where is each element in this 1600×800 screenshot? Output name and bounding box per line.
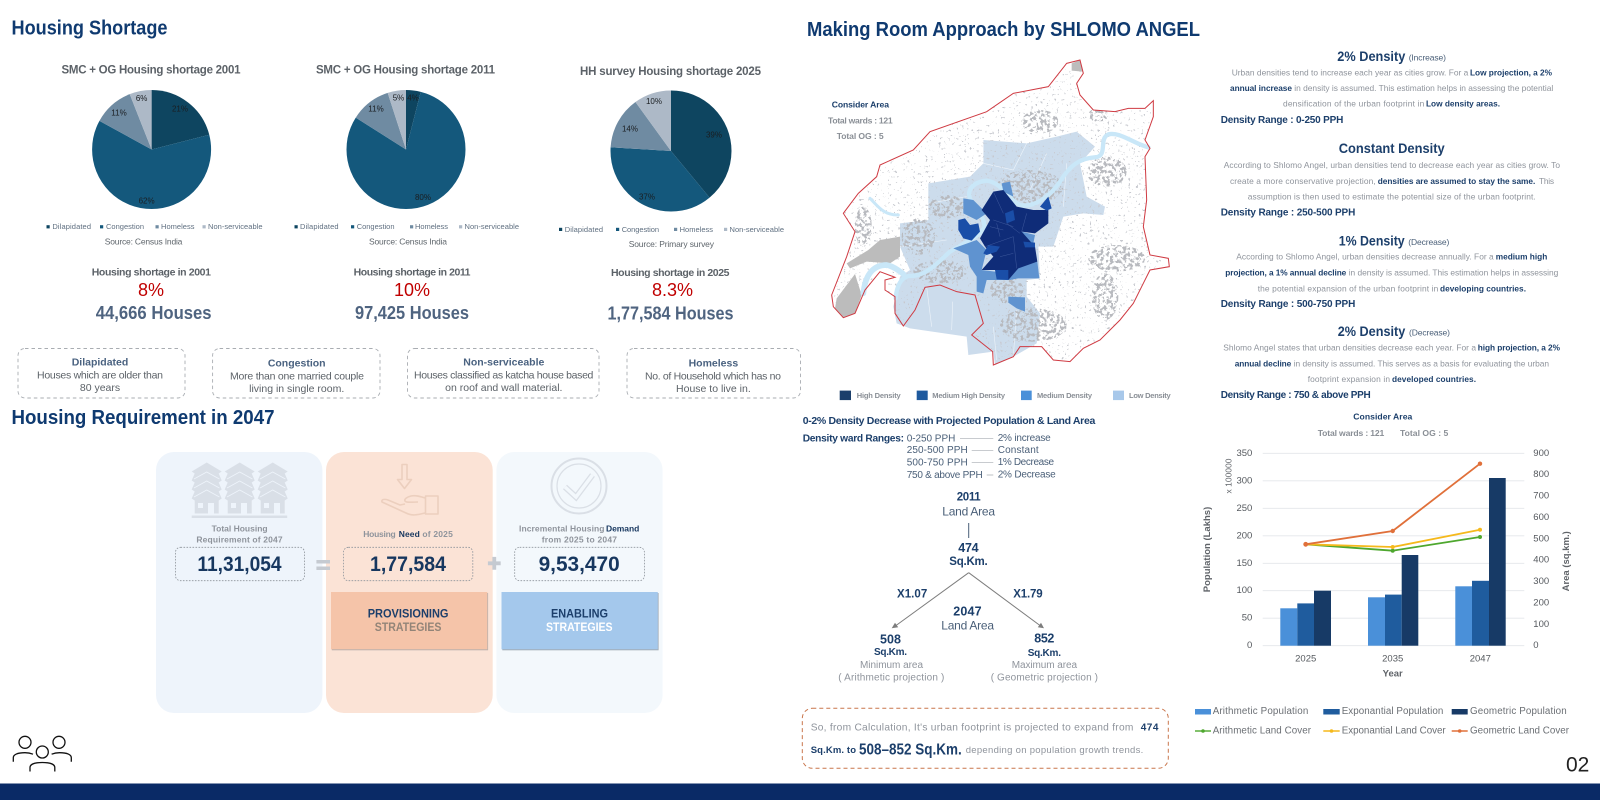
text block: constant density: create a more conservative projection, bbox=[1230, 176, 1376, 186]
note: consider area: Total wards : 121 bbox=[1318, 428, 1385, 438]
map legend: Medium High Density bbox=[932, 391, 1006, 400]
text block: 2% density increase: Urban densities tend to increase each year as cities grow. For a bbox=[1232, 67, 1469, 77]
value: 1,77,584: 1,77,584 bbox=[370, 553, 446, 576]
panel: incremental demand bbox=[496, 452, 663, 713]
legend 2011: Dilapidated bbox=[300, 222, 338, 231]
callout: urban footprint: 474 bbox=[1141, 722, 1159, 734]
axis titles: Area (sq.km.) bbox=[1561, 531, 1572, 591]
legend 2025 bbox=[559, 225, 784, 234]
callout: urban footprint: depending on population growth trends. bbox=[966, 745, 1143, 756]
density ward ranges table: 250-500 PPH bbox=[907, 445, 968, 456]
medium high wards bbox=[958, 197, 1052, 280]
text block: 2% density decrease: footprint expansion in bbox=[1308, 374, 1390, 384]
legend 2025: Dilapidated bbox=[565, 225, 603, 234]
label: incremental demand: Incremental Housing bbox=[519, 524, 604, 534]
note: consider area: Consider Area bbox=[1353, 412, 1413, 422]
combo chart: population and land area bbox=[1195, 448, 1572, 736]
label: total requirement: Total Housing bbox=[212, 524, 268, 534]
gridlines bbox=[1263, 453, 1524, 646]
pie labels 2011: 80% bbox=[415, 193, 431, 202]
note: consider area: Total OG : 5 bbox=[1400, 428, 1449, 438]
chart legend: Arithmetic Population bbox=[1213, 706, 1308, 717]
definition: Homeless bbox=[627, 348, 800, 398]
text block: 1% density decrease: (Decrease) bbox=[1408, 237, 1449, 247]
multiplier labels: X1.07 bbox=[897, 588, 927, 600]
box: provisioning strategies: STRATEGIES bbox=[375, 620, 441, 634]
map note: consider area: Consider Area bbox=[832, 100, 889, 110]
heading: Making Room Approach: Making Room Approach by SHLOMO ANGEL bbox=[807, 19, 1200, 41]
definition: Dilapidated: 80 years bbox=[80, 382, 120, 394]
legend 2025: Non-serviceable bbox=[730, 225, 784, 234]
text block: 2% density increase: densification of the urban footprint in bbox=[1283, 98, 1425, 108]
legend 2001 bbox=[46, 222, 262, 231]
line: arithmetic land cover bbox=[1306, 535, 1482, 553]
text block: 2% density increase: Low projection, a 2% bbox=[1470, 67, 1553, 77]
density ward ranges table: 500-750 PPH bbox=[907, 458, 968, 468]
legend 2011: Non-serviceable bbox=[464, 222, 519, 231]
result: maximum area: ( Geometric projection ) bbox=[991, 672, 1098, 684]
label: incremental demand: from 2025 to 2047 bbox=[542, 534, 617, 544]
chart legend: Exponantial Population bbox=[1342, 706, 1443, 717]
legend 2001: Dilapidated bbox=[52, 222, 91, 231]
value: 9,53,470: 9,53,470 bbox=[539, 553, 620, 576]
right axis ticks: 0 bbox=[1533, 640, 1539, 651]
panel: housing need bbox=[326, 452, 493, 713]
callout: urban footprint: Sq.Km. to bbox=[811, 745, 856, 756]
text block: 1% density decrease: 1% Density bbox=[1339, 234, 1405, 248]
text block: 1% density decrease: medium high bbox=[1496, 252, 1547, 262]
panel: total housing requirement bbox=[156, 452, 322, 713]
definition: Non-serviceable bbox=[408, 348, 599, 398]
result: minimum area: Minimum area bbox=[860, 660, 923, 671]
left axis ticks: 350 bbox=[1236, 448, 1252, 459]
multiplier labels: X1.79 bbox=[1013, 588, 1043, 600]
map legend: High Density bbox=[857, 391, 902, 400]
icon: check badge bbox=[552, 458, 606, 514]
sparse built-up speckle bbox=[830, 60, 1170, 367]
definition: Congestion: More than one married couple bbox=[230, 371, 364, 383]
chart title 2001: SMC + OG Housing shortage 2001 bbox=[62, 64, 241, 76]
axis titles: Population (Lakhs) bbox=[1202, 507, 1213, 592]
text block: 2% density decrease: Shlomo Angel states that urban densities decrease each year. For a bbox=[1223, 343, 1476, 353]
definition: Congestion: Congestion bbox=[268, 358, 326, 370]
stat 2001: Housing shortage in 2001 bbox=[92, 267, 211, 279]
left axis ticks: 0 bbox=[1247, 640, 1252, 651]
study area boundary bbox=[832, 60, 1169, 365]
chart legend: Geometric Land Cover bbox=[1470, 726, 1570, 736]
box: enabling strategies: ENABLING bbox=[551, 606, 608, 620]
value: 11,31,054: 11,31,054 bbox=[197, 553, 282, 576]
density ward ranges table bbox=[803, 433, 1056, 481]
density ward ranges table: 0-250 PPH bbox=[907, 434, 955, 444]
text block: 2% density decrease: developed countries. bbox=[1392, 374, 1476, 384]
panel: pie chart 2025 bbox=[559, 66, 784, 324]
source 2025: Source: Primary survey bbox=[629, 239, 715, 249]
stat 2025: Housing shortage in 2025 bbox=[611, 267, 730, 279]
definition: Homeless: House to live in. bbox=[676, 383, 751, 395]
left axis ticks bbox=[1236, 448, 1252, 651]
text block: 1% density decrease: developing countries. bbox=[1440, 283, 1526, 293]
right axis ticks: 400 bbox=[1533, 555, 1549, 566]
density ward ranges table: Density ward Ranges: bbox=[803, 434, 904, 444]
arrow: to maximum area bbox=[969, 573, 1044, 628]
right axis ticks: 700 bbox=[1533, 491, 1549, 502]
text block: 2% density decrease: annual decline bbox=[1235, 359, 1292, 369]
text block: 2% density decrease: Density Range : 750 & above PPH bbox=[1221, 390, 1371, 401]
label: total requirement bbox=[196, 524, 283, 544]
map legend bbox=[840, 391, 1172, 400]
tree: 2011 land area: Sq.Km. bbox=[949, 556, 988, 568]
text block: 1% density decrease: projection, a 1% annual decline bbox=[1225, 268, 1347, 278]
arrow: to minimum area bbox=[892, 573, 969, 628]
result: maximum area bbox=[991, 632, 1098, 684]
axis titles bbox=[1202, 458, 1572, 592]
panel: pie chart 2011 bbox=[294, 64, 519, 323]
text block: constant density: Constant Density bbox=[1339, 141, 1445, 156]
pie 2011 bbox=[376, 120, 436, 179]
stat 2011: 97,425 Houses bbox=[355, 302, 469, 323]
right axis ticks: 300 bbox=[1533, 576, 1549, 587]
text block: constant density bbox=[1221, 141, 1560, 218]
pie labels 2011 bbox=[368, 94, 431, 202]
result: minimum area: 508 bbox=[880, 632, 901, 646]
label: incremental demand bbox=[519, 524, 639, 544]
result: minimum area: ( Arithmetic projection ) bbox=[838, 672, 944, 684]
pie labels 2025 bbox=[622, 97, 722, 202]
pie labels 2011: 4% bbox=[407, 94, 419, 102]
text block: 2% density decrease: high projection, a 2% bbox=[1478, 343, 1561, 353]
chart title 2011: SMC + OG Housing shortage 2011 bbox=[316, 64, 496, 76]
dense built-up speckle bbox=[855, 108, 1145, 342]
stat 2001: 8% bbox=[138, 280, 164, 300]
text block: 2% density increase: Low density areas. bbox=[1426, 98, 1500, 108]
text block: 2% density decrease: 2% Density bbox=[1338, 324, 1406, 339]
label: housing need: of 2025 bbox=[422, 529, 453, 539]
text block: 2% density decrease: in density is assumed. This serves as a basis for evaluating the urban bbox=[1294, 359, 1549, 369]
map: density wards bbox=[830, 60, 1170, 367]
pie labels 2025: 14% bbox=[622, 124, 638, 134]
pie labels 2025: 37% bbox=[639, 192, 655, 202]
multiplier labels bbox=[897, 588, 1043, 600]
panel: pie chart 2001 bbox=[46, 64, 262, 323]
line: geometric land cover bbox=[1303, 462, 1482, 547]
text block: constant density: Density Range : 250-500 PPH bbox=[1221, 208, 1355, 218]
pie labels 2001 bbox=[111, 94, 188, 206]
icon: three houses bbox=[192, 462, 288, 518]
pie labels 2025: 10% bbox=[646, 97, 662, 106]
result: maximum area: Maximum area bbox=[1012, 660, 1077, 671]
tree: 2011 land area: 2011 bbox=[957, 492, 981, 504]
text block: 1% density decrease bbox=[1221, 234, 1559, 310]
definition: Dilapidated: Houses which are older than bbox=[37, 370, 163, 382]
legend 2001: Congestion bbox=[106, 222, 144, 231]
text block: 1% density decrease: Density Range : 500-750 PPH bbox=[1221, 299, 1355, 310]
bars: geometric population bbox=[1314, 478, 1506, 646]
map base area bbox=[832, 60, 1169, 365]
page number: 02 bbox=[1566, 754, 1589, 776]
density ward ranges table: 1% Decrease bbox=[998, 457, 1054, 468]
text block: constant density: assumption is then used to estimate the potential size of the urban footprint. bbox=[1248, 191, 1536, 201]
text block: 2% density increase: Density Range : 0-250 PPH bbox=[1221, 115, 1343, 126]
heading: Housing Requirement in 2047: Housing Requirement in 2047 bbox=[12, 407, 274, 429]
pie labels 2001: 21% bbox=[172, 104, 188, 114]
ward lines bbox=[985, 192, 1027, 268]
tree: 2011 land area: Land Area bbox=[942, 505, 995, 519]
density ward ranges table: 2% Decrease bbox=[998, 470, 1056, 480]
chart title 2025: HH survey Housing shortage 2025 bbox=[580, 66, 762, 78]
bars: arithmetic population bbox=[1280, 586, 1472, 646]
map legend: Medium Density bbox=[1037, 391, 1093, 400]
chart legend: Exponantial Land Cover bbox=[1342, 726, 1446, 736]
stat 2025: 8.3% bbox=[652, 280, 693, 300]
legend 2011: Homeless bbox=[415, 222, 448, 231]
value: 1,77,584 bbox=[343, 547, 473, 581]
tree: 2011 land area bbox=[942, 492, 995, 568]
right axis ticks: 800 bbox=[1533, 469, 1549, 480]
tree: 2011 land area: 474 bbox=[958, 541, 979, 555]
x axis labels: 2035 bbox=[1382, 654, 1403, 664]
definition: Non-serviceable: Houses classified as katcha house based bbox=[414, 370, 594, 382]
heading: density decrease: 0-2% Density Decrease with Projected Population & Land Area bbox=[803, 415, 1095, 427]
footer bar bbox=[0, 784, 1600, 800]
label: total requirement: Requirement of 2047 bbox=[196, 534, 283, 544]
x axis labels: 2025 bbox=[1295, 654, 1316, 664]
definition: Homeless: No. of Household which has no bbox=[645, 371, 781, 383]
pie labels 2001: 6% bbox=[136, 94, 147, 103]
box: provisioning strategies: PROVISIONING bbox=[368, 606, 448, 620]
map note: consider area: Total OG : 5 bbox=[837, 131, 884, 141]
right axis ticks: 100 bbox=[1533, 619, 1549, 630]
result: minimum area: Sq.Km. bbox=[874, 647, 907, 658]
right axis ticks bbox=[1533, 448, 1549, 651]
text block: constant density: According to Shlomo Angel, urban densities tend to decrease each year as cities grow. To bbox=[1224, 160, 1560, 170]
stat 2011: 10% bbox=[394, 280, 430, 300]
right axis ticks: 900 bbox=[1533, 448, 1549, 459]
left axis ticks: 150 bbox=[1236, 558, 1252, 569]
pie labels 2001: 11% bbox=[111, 108, 127, 118]
density ward ranges table: Constant bbox=[998, 445, 1039, 456]
text block: 1% density decrease: the potential expansion of the urban footprint in bbox=[1258, 283, 1439, 293]
legend 2001: Non-serviceable bbox=[208, 222, 262, 231]
text block: 2% density increase: (Increase) bbox=[1409, 52, 1446, 62]
operator: equals bbox=[316, 560, 330, 570]
legend 2011 bbox=[294, 222, 519, 231]
legend 2025: Congestion bbox=[622, 225, 659, 234]
tree: 2047 land area bbox=[941, 604, 994, 633]
x axis labels: Year bbox=[1383, 668, 1403, 680]
axis titles: x 100000 bbox=[1223, 458, 1233, 493]
label: housing need bbox=[363, 529, 453, 539]
right axis ticks: 600 bbox=[1533, 512, 1549, 523]
source 2011: Source: Census India bbox=[369, 236, 447, 246]
density ward ranges table: 750 & above PPH bbox=[907, 470, 983, 481]
pie labels 2001: 62% bbox=[139, 196, 155, 206]
left axis ticks: 100 bbox=[1236, 585, 1252, 596]
heading: Housing Shortage: Housing Shortage bbox=[12, 18, 168, 40]
stat 2001 bbox=[92, 267, 212, 323]
callout: urban footprint: So, from Calculation, It's urban footprint is projected to expand from bbox=[811, 722, 1133, 734]
pie 2001 bbox=[122, 120, 181, 179]
river bbox=[863, 134, 1148, 298]
high density core bbox=[980, 190, 1048, 280]
text block: 2% density increase: 2% Density bbox=[1337, 49, 1406, 64]
label: housing need: Housing bbox=[363, 529, 396, 539]
x axis labels bbox=[1295, 654, 1491, 680]
callout: urban footprint: 508–852 Sq.Km. bbox=[859, 742, 962, 758]
definition: Homeless: Homeless bbox=[689, 358, 738, 370]
tree: 2047 land area: 2047 bbox=[953, 604, 982, 618]
map note: consider area bbox=[828, 100, 893, 141]
large grey settlements bbox=[835, 60, 1083, 318]
definition: Congestion: living in single room. bbox=[249, 383, 344, 395]
operator: plus bbox=[488, 557, 501, 570]
chart legend: Arithmetic Land Cover bbox=[1213, 726, 1312, 736]
text block: 1% density decrease: According to Shlomo Angel, urban densities decrease annually. For a bbox=[1236, 252, 1494, 262]
stat 2001: 44,666 Houses bbox=[96, 302, 212, 323]
result: maximum area: Sq.Km. bbox=[1028, 648, 1061, 659]
text block: 2% density decrease: (Decrease) bbox=[1409, 328, 1450, 338]
icon: people group bbox=[13, 736, 71, 772]
legend 2011: Congestion bbox=[357, 222, 394, 231]
left axis ticks: 50 bbox=[1242, 613, 1252, 624]
icon: hand with arrow bbox=[382, 464, 438, 515]
density ward ranges table: 2% increase bbox=[998, 433, 1051, 444]
definition: Dilapidated: Dilapidated bbox=[72, 357, 128, 369]
pie labels 2025: 39% bbox=[706, 130, 722, 140]
text block: 2% density increase bbox=[1221, 49, 1553, 126]
left axis ticks: 250 bbox=[1236, 503, 1252, 514]
chart legend bbox=[1195, 706, 1570, 736]
bars: exponential population bbox=[1297, 581, 1489, 646]
chart legend: Geometric Population bbox=[1470, 706, 1567, 717]
box: enabling strategies: STRATEGIES bbox=[546, 620, 613, 634]
definition: Non-serviceable: Non-serviceable bbox=[463, 357, 545, 369]
pie labels 2011: 11% bbox=[368, 104, 384, 114]
pie labels 2011: 5% bbox=[393, 94, 404, 102]
note: consider area bbox=[1318, 412, 1449, 438]
definition: Non-serviceable: on roof and wall material. bbox=[445, 382, 562, 394]
callout: urban footprint bbox=[802, 708, 1168, 768]
box: enabling strategies bbox=[502, 592, 659, 650]
stat 2025 bbox=[608, 267, 734, 324]
legend 2025: Homeless bbox=[680, 225, 713, 234]
line: exponential land cover bbox=[1306, 528, 1482, 549]
medium density wards bbox=[953, 182, 1039, 312]
text block: 2% density decrease bbox=[1221, 324, 1561, 401]
label: incremental demand: Demand bbox=[606, 524, 639, 534]
left axis ticks: 300 bbox=[1236, 475, 1252, 486]
stat 2011: Housing shortage in 2011 bbox=[354, 267, 471, 279]
left axis ticks: 200 bbox=[1236, 530, 1252, 541]
text block: constant density: This bbox=[1539, 176, 1554, 186]
stat 2025: 1,77,584 Houses bbox=[608, 302, 734, 324]
text block: 2% density increase: annual increase bbox=[1230, 83, 1292, 93]
map note: consider area: Total wards : 121 bbox=[828, 115, 893, 125]
source 2001: Source: Census India bbox=[105, 236, 183, 246]
right axis ticks: 500 bbox=[1533, 533, 1549, 544]
x axis labels: 2047 bbox=[1470, 654, 1491, 664]
result: minimum area bbox=[838, 632, 944, 684]
pie 2025 bbox=[641, 121, 701, 181]
value: 9,53,470 bbox=[515, 547, 644, 581]
legend 2001: Homeless bbox=[161, 222, 195, 231]
definition: Congestion bbox=[213, 348, 380, 398]
map legend: Low Density bbox=[1129, 391, 1172, 400]
low density wards bbox=[893, 132, 1105, 365]
text block: 1% density decrease: in density is assumed. This estimation helps in assessing bbox=[1349, 268, 1559, 278]
value: 11,31,054 bbox=[176, 547, 304, 581]
label: housing need: Need bbox=[399, 529, 420, 539]
definition: Dilapidated bbox=[18, 348, 185, 398]
text block: 2% density increase: in density is assumed. This estimation helps in assessing the potential bbox=[1294, 83, 1553, 93]
tree: 2047 land area: Land Area bbox=[941, 619, 994, 633]
box: provisioning strategies bbox=[331, 592, 488, 650]
stat 2011 bbox=[354, 267, 471, 323]
result: maximum area: 852 bbox=[1034, 632, 1054, 646]
text block: constant density: densities are assumed to stay the same. bbox=[1378, 176, 1535, 186]
right axis ticks: 200 bbox=[1533, 598, 1549, 608]
